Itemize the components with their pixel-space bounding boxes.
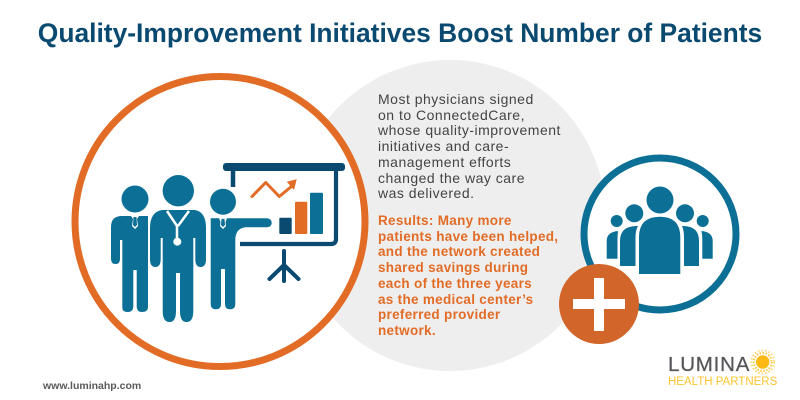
text block: description: management efforts xyxy=(378,154,511,170)
text block: results: shared savings during xyxy=(378,260,528,275)
title: Quality-Improvement Initiatives Boost Number of Patients xyxy=(38,18,762,48)
text block: description xyxy=(378,91,561,201)
text block: results: preferred provider xyxy=(378,307,500,322)
icon: sun logo xyxy=(751,350,774,374)
logo: Lumina Health Partners xyxy=(668,353,777,388)
icon: group of people xyxy=(607,186,713,274)
text block: results: Results: Many more xyxy=(378,213,512,228)
icon: centre doctor xyxy=(150,175,206,322)
panel: gray circle backdrop xyxy=(294,60,606,371)
text block: description: whose quality-improvement xyxy=(378,122,561,138)
text block: results: and the network created xyxy=(378,244,540,259)
icon: plus badge xyxy=(559,264,639,344)
text block: description: on to ConnectedCare, xyxy=(378,107,525,123)
icon: pointing person xyxy=(210,189,272,309)
text block: results: network. xyxy=(378,323,436,338)
text block: results: as the medical center’s xyxy=(378,292,533,307)
logo subtitle: HEALTH PARTNERS xyxy=(668,376,777,388)
website url: www.luminahp.com xyxy=(43,380,141,392)
text block: description: changed the way care xyxy=(378,170,525,186)
icon: left person xyxy=(111,186,148,312)
icon: rising arrow xyxy=(252,179,297,196)
text block: results xyxy=(378,213,558,338)
text block: description: was delivered. xyxy=(378,185,474,201)
panel: orange ring xyxy=(75,76,365,366)
text block: results: each of the three years xyxy=(378,276,532,291)
bar chart xyxy=(279,193,323,234)
logo wordmark: LUMINA xyxy=(668,353,750,376)
text block: results: patients have been helped, xyxy=(378,229,558,244)
icon: presentation board xyxy=(223,163,345,281)
text block: description: Most physicians signed xyxy=(378,91,534,107)
text block: description: initiatives and care- xyxy=(378,138,509,154)
panel: teal ring xyxy=(584,158,736,310)
